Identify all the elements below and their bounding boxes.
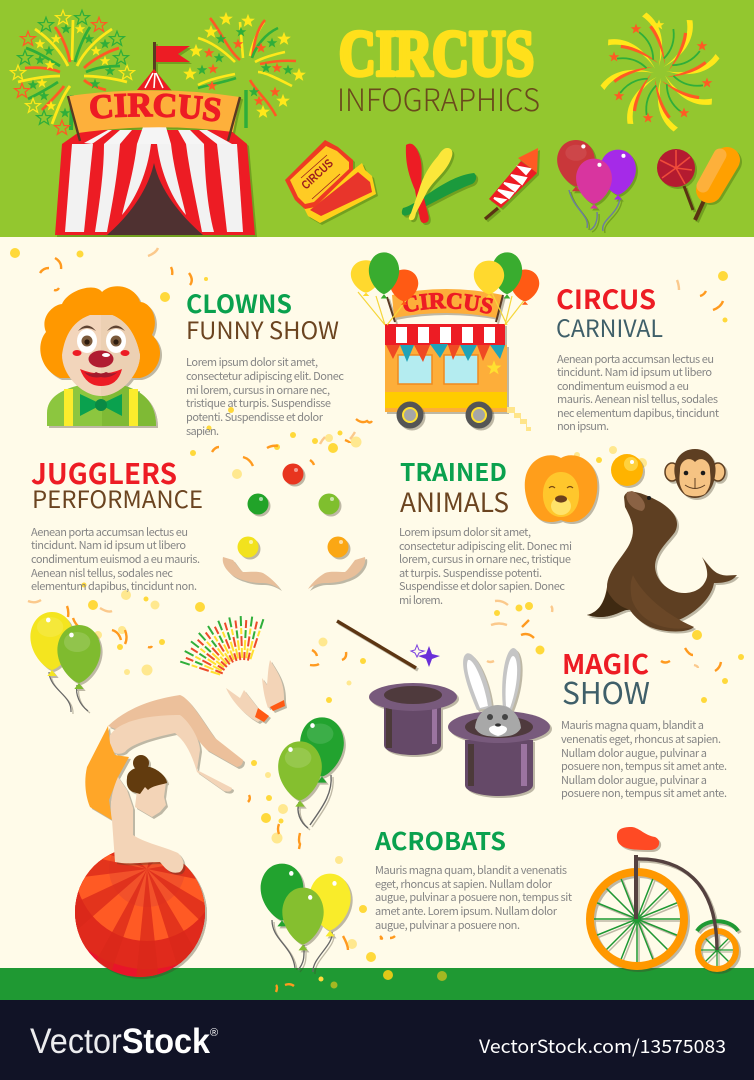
icon: right firework — [183, 12, 306, 128]
icon: sparkles — [411, 645, 440, 667]
icon: balloons lower — [261, 864, 351, 972]
text: acrobats body: amet ante. Lorem ipsum. Nullam dolor — [375, 903, 558, 919]
illustration: clown — [40, 286, 160, 426]
tent banner — [68, 90, 240, 133]
subtitle: INFOGRAPHICS — [337, 75, 540, 120]
tent door — [107, 163, 203, 235]
text: jugglers body: Aenean porta accumsan lectus eu — [31, 524, 188, 540]
heading: trained: TRAINED — [400, 453, 507, 489]
text: acrobats body: eget, rhoncus at sapien. Nullam dolor — [375, 876, 553, 892]
illustration: rabbit in hat — [448, 648, 550, 796]
text: acrobats body — [375, 862, 572, 933]
icon: lollipop — [657, 149, 695, 210]
icon: rocket — [485, 148, 538, 219]
text: magic body: posuere non, tempus sit amet ante. — [561, 785, 727, 801]
text: animals body: mi lorem. — [399, 592, 443, 608]
text: clowns body: Lorem ipsum dolor sit amet, — [186, 354, 318, 370]
confetti and dots — [10, 248, 744, 992]
icon: tickets — [285, 140, 376, 223]
icon: ball on seal's nose — [611, 454, 643, 486]
footer: registered mark: ® — [210, 1027, 218, 1039]
icon: confetti fan — [180, 616, 263, 675]
text: magic body: venenatis eget, rhoncus at sapien. — [561, 731, 721, 747]
body — [85, 695, 243, 873]
text: acrobats body: augue, pulvinar a posuere non, tempus sit — [375, 889, 572, 905]
background: cream page — [0, 237, 754, 968]
text: jugglers body: Aenean nisl tellus, sodales nec — [31, 565, 173, 581]
text: magic body: Mauris magna quam, blandit a — [561, 717, 704, 733]
text: jugglers body: condimentum euismod a eu mauris. — [31, 551, 200, 567]
text: carnival body: mauris. Aenean nisl tellus, sodales — [557, 391, 718, 407]
panel: acrobats — [30, 612, 738, 990]
illustration: seal — [587, 491, 737, 632]
illustration: penny farthing bicycle — [590, 827, 738, 969]
icon: balloons mid — [278, 717, 344, 828]
text: clowns body: consectetur adipiscing elit. Donec — [186, 368, 344, 384]
text: magic body: Nullam dolor augue, pulvinar a — [561, 772, 707, 788]
text: animals body: Suspendisse et dolor sapien. Donec — [399, 578, 565, 594]
text: magic body: posuere non, tempus sit amet ante. — [561, 758, 727, 774]
text: jugglers body — [31, 524, 200, 594]
text: animals body — [399, 524, 572, 608]
text: carnival body: condimentum euismod a eu — [557, 378, 689, 394]
heading: jugglers: JUGGLERS — [31, 452, 177, 493]
footer: VectorStock logo: VectorStock — [30, 1022, 210, 1061]
icon: header balloons — [557, 140, 636, 231]
panel: circus carnival — [350, 252, 719, 434]
heading: magic: MAGIC — [562, 643, 649, 682]
text: jugglers body: elementum dapibus, tincidunt non. — [31, 578, 197, 594]
panel: magic show — [337, 621, 727, 801]
heading: clowns: CLOWNS — [186, 285, 292, 321]
icon: magic wand — [337, 621, 416, 668]
illustration: monkey — [665, 449, 725, 498]
tent body — [55, 130, 255, 235]
background: dark footer — [0, 1000, 754, 1080]
flag — [153, 42, 190, 72]
tent top — [137, 69, 171, 90]
icon: clapping hands — [226, 660, 285, 722]
text: animals body: consectetur adipiscing elit. Donec mi — [399, 538, 572, 554]
text: magic body: Nullam dolor augue, pulvinar a — [561, 745, 707, 761]
illustration: juggling balls and hands — [223, 464, 365, 589]
icon: juggling clubs — [402, 144, 476, 223]
heading: circus: CIRCUS — [556, 278, 656, 317]
illustration: circus tent — [55, 42, 257, 237]
text: carnival body: tincidunt. Nam id ipsum ut libero — [557, 364, 712, 380]
cart sign text: CIRCUS — [403, 292, 494, 314]
illustration: empty hat — [369, 683, 457, 755]
panel: clowns — [40, 285, 344, 439]
background: green floor — [0, 968, 754, 1000]
text: jugglers body: tincidunt. Nam id ipsum ut libero — [31, 537, 186, 553]
subheading: performance: PERFORMANCE — [32, 481, 203, 515]
subheading: funny show: FUNNY SHOW — [186, 312, 339, 346]
icon: tickets: CIRCUS — [298, 156, 336, 192]
text: carnival body: nec elementum dapibus, tincidunt — [557, 405, 719, 421]
background: header green — [0, 0, 754, 237]
text: magic body — [561, 717, 727, 801]
text: acrobats body: Mauris magna quam, blandit a venenatis — [375, 862, 567, 878]
text: carnival body — [557, 351, 719, 434]
text: carnival body: Aenean porta accumsan lectus eu — [557, 351, 714, 367]
panel: trained animals — [399, 449, 737, 632]
text: clowns body: potenti. Suspendisse et dolor — [186, 409, 324, 425]
title: CIRCUS — [339, 18, 534, 90]
text: clowns body: tristique at turpis. Suspendisse — [186, 395, 331, 411]
icon: left firework — [11, 10, 134, 134]
subheading: animals: ANIMALS — [400, 481, 509, 520]
text: acrobats body: augue, pulvinar a posuere non. — [375, 917, 520, 933]
panel: jugglers — [31, 452, 365, 594]
tent banner text: CIRCUS — [90, 93, 221, 122]
text: animals body: Lorem ipsum dolor sit amet, — [399, 524, 531, 540]
ball — [75, 852, 207, 979]
subheading: carnival: CARNIVAL — [556, 310, 663, 344]
illustration: acrobat on ball — [75, 695, 245, 979]
text: clowns body: sapien. — [186, 423, 219, 439]
subheading: show: SHOW — [562, 669, 650, 713]
text: carnival body: non ipsum. — [557, 418, 609, 434]
footer: image URL: VectorStock.com/13575083 — [479, 1033, 726, 1059]
text: animals body: lorem, cursus in ornare nec, tristique — [399, 551, 571, 567]
illustration: lion — [525, 455, 597, 522]
text: clowns body: mi lorem, cursus in ornare nec, — [186, 382, 330, 398]
text: clowns body — [186, 354, 344, 439]
icon: balloons upper left — [30, 612, 101, 712]
icon: swirl firework — [588, 0, 732, 144]
heading: acrobats: ACROBATS — [374, 822, 506, 857]
text: animals body: at turpis. Suspendisse potenti. — [399, 565, 542, 581]
illustration: circus cart — [350, 252, 540, 431]
icon: ice pop — [695, 155, 727, 220]
head — [127, 755, 167, 817]
